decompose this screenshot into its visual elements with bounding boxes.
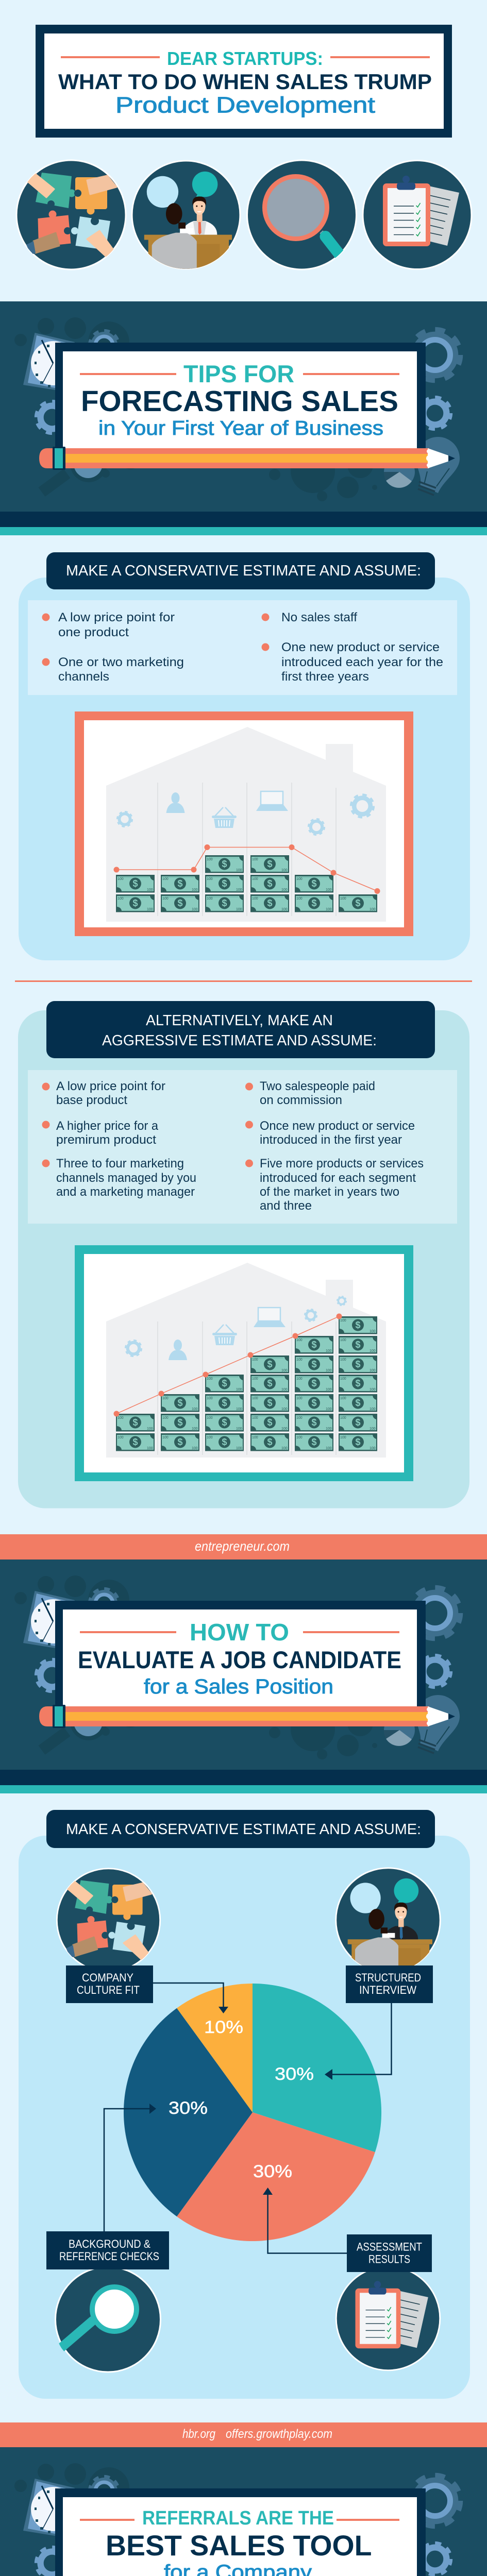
chart: aggressive revenue house: 100 (162, 1397, 169, 1400)
chart: aggressive revenue house: 100 (192, 1408, 198, 1411)
chart: aggressive revenue house: $ (355, 1320, 361, 1330)
title box: DEAR STARTUPS: (167, 48, 323, 69)
chart: aggressive revenue house: 100 (236, 1408, 242, 1411)
chart: conservative revenue house: 100 (236, 908, 242, 911)
chart: conservative revenue house: 100 (117, 897, 124, 901)
arrow: interview (325, 2003, 392, 2080)
chart: conservative revenue house: 100 (252, 897, 258, 901)
chart: aggressive revenue house: 100 (117, 1436, 124, 1439)
assumptions list: of the market in years two (260, 1185, 399, 1199)
chart: aggressive revenue house: 100 (340, 1358, 346, 1362)
source bar: entrepreneur.com: entrepreneur.com (195, 1538, 290, 1554)
chart: aggressive revenue house: $ (267, 1398, 273, 1408)
section header: forecasting: in Your First Year of Business (98, 417, 383, 439)
chart: aggressive revenue house: 100 (370, 1330, 376, 1333)
chart: aggressive revenue house: 100 (162, 1436, 169, 1439)
assumptions list: Five more products or services (260, 1157, 424, 1171)
pie chart: 30% (253, 2162, 292, 2181)
source bar: hbr.org, growthplay (0, 2422, 487, 2447)
panel: aggressive estimate (18, 1001, 469, 1509)
source bar: entrepreneur.com (0, 1534, 487, 1560)
chart: aggressive revenue house: 100 (370, 1349, 376, 1353)
chart: aggressive revenue house: 100 (236, 1427, 242, 1431)
icon: company culture fit (57, 1869, 160, 1972)
assumptions list: One new product or service (281, 640, 440, 654)
chart: aggressive revenue house: 100 (281, 1369, 288, 1372)
chart: aggressive revenue house: $ (222, 1417, 227, 1428)
panel: conservative estimate (19, 552, 470, 960)
chart: aggressive revenue house: $ (355, 1340, 361, 1350)
chart: aggressive revenue house: 100 (162, 1416, 169, 1420)
chart: aggressive revenue house: 100 (147, 1447, 153, 1450)
icon: puzzle hands (16, 160, 126, 269)
chart: conservative revenue house: 100 (147, 908, 153, 911)
panel: conservative estimate: MAKE A CONSERVATIVE ESTIMATE AND ASSUME: (66, 563, 421, 579)
chart: aggressive revenue house: 100 (252, 1377, 258, 1381)
chart: aggressive revenue house: 100 (252, 1358, 258, 1362)
chart: aggressive revenue house: $ (267, 1437, 273, 1447)
chart: conservative revenue house: 100 (296, 897, 303, 901)
chart: conservative revenue house: 100 (281, 869, 288, 872)
assumptions list: Three to four marketing (56, 1157, 184, 1171)
label: structured interview: STRUCTURED (355, 1971, 421, 1984)
chart: aggressive revenue house: $ (177, 1437, 183, 1447)
chart: aggressive revenue house: 100 (252, 1436, 258, 1439)
chart: conservative revenue house: 100 (192, 888, 198, 892)
assumptions list: base product (56, 1093, 127, 1107)
assumptions list (42, 611, 443, 684)
label: assessment results: RESULTS (368, 2252, 410, 2266)
chart: aggressive revenue house: 100 (370, 1369, 376, 1372)
chart: conservative revenue house: 100 (326, 908, 332, 911)
chart: aggressive revenue house: 100 (326, 1349, 332, 1353)
chart: conservative revenue house (75, 711, 413, 936)
chart: aggressive revenue house: $ (132, 1437, 138, 1447)
chart: conservative revenue house: $ (311, 898, 317, 908)
chart: conservative revenue house: 100 (281, 888, 288, 892)
assumptions list: introduced each year for the (281, 655, 443, 669)
chart: conservative revenue house: 100 (370, 908, 376, 911)
assumptions list: and three (260, 1199, 312, 1213)
chart: aggressive revenue house: 100 (207, 1416, 213, 1420)
assumptions list: channels managed by you (56, 1171, 196, 1185)
icon: background magnifier (56, 2267, 161, 2372)
section header: evaluate a job candidate: HOW TO (190, 1619, 289, 1646)
chart: conservative revenue house: 100 (207, 877, 213, 881)
icon: interview (132, 161, 240, 270)
chart: conservative revenue house: $ (132, 878, 138, 889)
chart: aggressive revenue house: 100 (326, 1388, 332, 1392)
label: assessment results (347, 2234, 432, 2272)
chart: aggressive revenue house: $ (267, 1378, 273, 1388)
chart: aggressive revenue house: 100 (296, 1338, 303, 1342)
panel: aggressive estimate: AGGRESSIVE ESTIMATE AND ASSUME: (102, 1032, 377, 1049)
chart: conservative revenue house: $ (222, 859, 227, 869)
chart: conservative revenue house: $ (311, 878, 317, 889)
chart: aggressive revenue house: 100 (340, 1436, 346, 1439)
chart: aggressive revenue house: 100 (326, 1369, 332, 1372)
chart: aggressive revenue house: 100 (281, 1408, 288, 1411)
section header: evaluate a job candidate (0, 1560, 487, 1793)
arrow: background checks (104, 2104, 156, 2231)
panel: candidate evaluation pie (19, 1810, 470, 2399)
chart: aggressive revenue house: $ (311, 1437, 317, 1447)
chart: aggressive revenue house: $ (355, 1359, 361, 1369)
assumptions list: one product (58, 625, 129, 639)
chart: aggressive revenue house: 100 (340, 1377, 346, 1381)
assumptions list: introduced in the first year (260, 1133, 402, 1147)
icon: structured interview (336, 1868, 440, 1974)
label: background and reference checks: REFERENCE CHECKS (59, 2250, 159, 2263)
chart: conservative revenue house: $ (222, 878, 227, 889)
chart: aggressive revenue house: 100 (147, 1427, 153, 1431)
source bar: hbr.org, growthplay: offers.growthplay.com (226, 2427, 332, 2441)
section header: forecasting (0, 301, 487, 535)
chart: aggressive revenue house: $ (222, 1398, 227, 1408)
chart: aggressive revenue house: 100 (296, 1436, 303, 1439)
panel: aggressive estimate: ALTERNATIVELY, MAKE AN (146, 1012, 333, 1029)
chart: conservative revenue house: $ (355, 898, 361, 908)
assumptions list: Once new product or service (260, 1119, 415, 1133)
icon: magnifying glass (247, 160, 357, 269)
title box: WHAT TO DO WHEN SALES TRUMP (58, 70, 432, 94)
chart: conservative revenue house: 100 (252, 877, 258, 881)
assumptions list: No sales staff (281, 611, 357, 624)
chart: aggressive revenue house: 100 (281, 1447, 288, 1450)
chart: aggressive revenue house: 100 (340, 1397, 346, 1400)
chart: aggressive revenue house: $ (355, 1398, 361, 1408)
pie chart: 10% (204, 2018, 243, 2037)
section header: forecasting: FORECASTING SALES (81, 385, 398, 418)
section header: referrals: REFERRALS ARE THE (142, 2507, 334, 2529)
chart: aggressive revenue house: 100 (296, 1397, 303, 1400)
assumptions list: A higher price for a (56, 1119, 159, 1133)
chart: conservative revenue house: 100 (162, 897, 169, 901)
chart: aggressive revenue house: $ (132, 1417, 138, 1428)
source bar: hbr.org, growthplay: hbr.org (182, 2427, 216, 2441)
chart: aggressive revenue house: $ (177, 1417, 183, 1428)
chart: aggressive revenue house: $ (355, 1417, 361, 1428)
icon: assessment clipboard (336, 2266, 440, 2370)
assumptions list: A low price point for (56, 1079, 165, 1093)
chart: conservative revenue house: 100 (281, 908, 288, 911)
assumptions list: introduced for each segment (260, 1171, 416, 1185)
label: company culture fit: COMPANY (82, 1971, 133, 1984)
assumptions list: Two salespeople paid (260, 1079, 375, 1093)
chart: aggressive revenue house: 100 (252, 1416, 258, 1420)
chart: aggressive revenue house: 100 (281, 1427, 288, 1431)
section header: referrals: BEST SALES TOOL (106, 2529, 372, 2562)
pie chart (124, 1984, 381, 2241)
assumptions list: and a marketing manager (56, 1185, 195, 1199)
chart: aggressive revenue house: 100 (192, 1427, 198, 1431)
chart: aggressive revenue house: 100 (296, 1377, 303, 1381)
chart: aggressive revenue house: 100 (207, 1377, 213, 1381)
chart: conservative revenue house: 100 (207, 858, 213, 861)
chart: aggressive revenue house: 100 (370, 1388, 376, 1392)
chart: aggressive revenue house: 100 (370, 1447, 376, 1450)
chart: aggressive revenue house: 100 (207, 1436, 213, 1439)
arrow: assessment (263, 2188, 347, 2253)
chart: conservative revenue house: 100 (207, 897, 213, 901)
chart: aggressive revenue house: 100 (192, 1447, 198, 1450)
chart: conservative revenue house: 100 (340, 897, 346, 901)
chart: conservative revenue house: $ (132, 898, 138, 908)
chart: aggressive revenue house: $ (222, 1378, 227, 1388)
label: company culture fit: CULTURE FIT (77, 1984, 140, 1996)
assumptions list: channels (58, 670, 109, 684)
chart: conservative revenue house: 100 (296, 877, 303, 881)
assumptions list: One or two marketing (58, 655, 184, 669)
chart: conservative revenue house: 100 (252, 858, 258, 861)
assumptions list: first three years (281, 670, 369, 684)
label: company culture fit (66, 1965, 153, 2003)
chart: aggressive revenue house: 100 (296, 1358, 303, 1362)
chart: aggressive revenue house: 100 (340, 1338, 346, 1342)
chart: aggressive revenue house: $ (222, 1437, 227, 1447)
chart: conservative revenue house: $ (267, 878, 273, 889)
chart: aggressive revenue house: 100 (326, 1408, 332, 1411)
label: structured interview: INTERVIEW (359, 1984, 416, 1996)
chart: conservative revenue house: 100 (236, 888, 242, 892)
icon: clipboard (363, 161, 472, 269)
chart: aggressive revenue house: 100 (117, 1416, 124, 1420)
assumptions list (42, 1079, 424, 1213)
chart: conservative revenue house: 100 (117, 877, 124, 881)
chart: aggressive revenue house: $ (311, 1398, 317, 1408)
chart: aggressive revenue house: $ (311, 1359, 317, 1369)
section header: evaluate a job candidate: EVALUATE A JOB CANDIDATE (78, 1646, 401, 1673)
chart: aggressive revenue house: 100 (296, 1416, 303, 1420)
chart: aggressive revenue house: 100 (252, 1397, 258, 1400)
chart: conservative revenue house: $ (267, 898, 273, 908)
section header: referrals (0, 2447, 487, 2576)
title box (36, 25, 452, 138)
arrow: culture fit (153, 1983, 228, 2013)
chart: aggressive revenue house: 100 (370, 1427, 376, 1431)
chart: conservative revenue house: 100 (147, 888, 153, 892)
chart: aggressive revenue house: 100 (281, 1388, 288, 1392)
chart: aggressive revenue house: 100 (236, 1447, 242, 1450)
chart: aggressive revenue house: 100 (207, 1397, 213, 1400)
chart: conservative revenue house: $ (267, 859, 273, 869)
section header: evaluate a job candidate: for a Sales Position (144, 1675, 333, 1698)
assumptions list: on commission (260, 1093, 342, 1107)
chart: aggressive revenue house: $ (267, 1359, 273, 1369)
chart: aggressive revenue house: $ (311, 1378, 317, 1388)
section header: forecasting: TIPS FOR (183, 360, 294, 387)
chart: conservative revenue house: $ (177, 878, 183, 889)
chart: conservative revenue house: $ (177, 898, 183, 908)
pie chart: 30% (275, 2064, 314, 2084)
chart: aggressive revenue house: $ (267, 1417, 273, 1428)
chart: aggressive revenue house: 100 (236, 1388, 242, 1392)
assumptions list: A low price point for (58, 611, 175, 624)
chart: aggressive revenue house: 100 (340, 1416, 346, 1420)
assumptions list: premirum product (56, 1133, 156, 1147)
chart: conservative revenue house: $ (222, 898, 227, 908)
chart: aggressive revenue house: 100 (326, 1427, 332, 1431)
chart: aggressive revenue house: 100 (370, 1408, 376, 1411)
chart: aggressive revenue house: $ (355, 1437, 361, 1447)
chart: aggressive revenue house: $ (311, 1417, 317, 1428)
chart: conservative revenue house: 100 (162, 877, 169, 881)
chart: aggressive revenue house: $ (311, 1340, 317, 1350)
chart: conservative revenue house: 100 (326, 888, 332, 892)
chart: conservative revenue house: 100 (236, 869, 242, 872)
panel: candidate evaluation pie: MAKE A CONSERVATIVE ESTIMATE AND ASSUME: (66, 1821, 421, 1838)
title box: Product Development (115, 93, 375, 117)
label: structured interview (346, 1965, 433, 2003)
chart: conservative revenue house: 100 (192, 908, 198, 911)
pie chart: 30% (169, 2098, 208, 2118)
chart: aggressive revenue house: 100 (340, 1319, 346, 1323)
label: assessment results: ASSESSMENT (357, 2240, 422, 2253)
label: background and reference checks (46, 2231, 169, 2269)
label: background and reference checks: BACKGROUND & (69, 2238, 150, 2250)
chart: aggressive revenue house (75, 1245, 413, 1481)
chart: aggressive revenue house: $ (177, 1398, 183, 1408)
chart: aggressive revenue house: $ (355, 1378, 361, 1388)
chart: aggressive revenue house: 100 (326, 1447, 332, 1450)
